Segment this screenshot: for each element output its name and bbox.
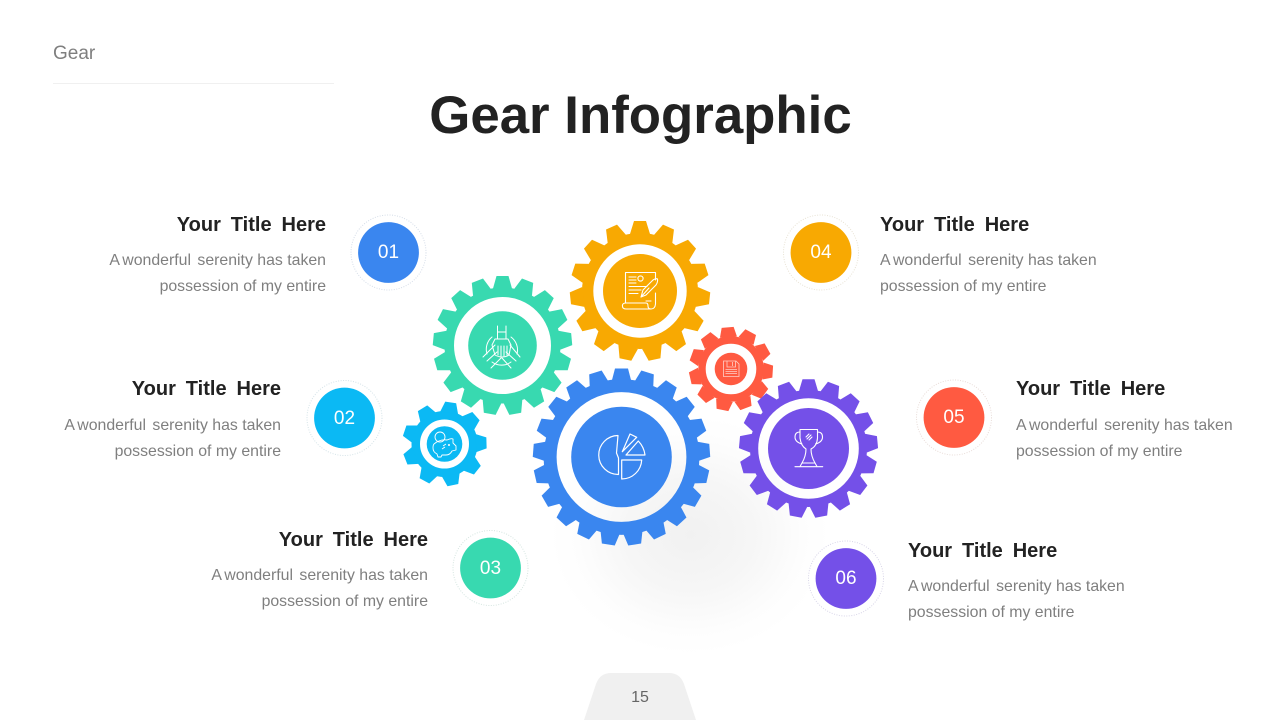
text block 03: A wonderful serenity has taken	[211, 567, 428, 584]
text block 01: possession of my entire	[160, 278, 326, 295]
text block 06: possession of my entire	[908, 604, 1074, 621]
badge number 04: 04	[810, 242, 832, 263]
badge number 01: 01	[378, 242, 399, 263]
text block 04: Your Title Here	[880, 214, 1029, 236]
text block 01: Your Title Here	[177, 214, 326, 236]
text block 02: A wonderful serenity has taken	[64, 417, 281, 434]
text block 05	[1016, 378, 1233, 460]
text block 05: A wonderful serenity has taken	[1016, 417, 1233, 434]
text block 03	[211, 529, 428, 610]
gear: red	[688, 327, 773, 412]
icon: trophy	[795, 430, 823, 467]
gear: green	[432, 276, 573, 416]
text block 02	[64, 378, 281, 460]
text block 03: possession of my entire	[262, 593, 428, 610]
gear: cyan	[402, 401, 487, 487]
text block 04: A wonderful serenity has taken	[880, 252, 1097, 269]
soft shadow under gears	[550, 415, 830, 655]
page number: 15	[631, 689, 649, 706]
badge number 03: 03	[480, 558, 501, 578]
badge number 05: 05	[943, 407, 965, 428]
text block 04	[880, 214, 1097, 295]
badge number 02: 02	[334, 408, 355, 428]
gear: blue	[533, 368, 710, 546]
icon: piggy bank	[433, 432, 456, 457]
icon: document and quill	[622, 272, 658, 309]
badge 04	[784, 215, 858, 290]
text block 02: possession of my entire	[115, 443, 281, 460]
section label: Gear	[53, 42, 95, 64]
badge number 06: 06	[835, 568, 857, 589]
page number tab	[584, 673, 696, 720]
badge 05	[916, 380, 992, 455]
text block 02: Your Title Here	[132, 378, 281, 400]
text block 05: possession of my entire	[1016, 443, 1182, 460]
text block 06: Your Title Here	[908, 540, 1057, 562]
text block 01: A wonderful serenity has taken	[109, 252, 326, 269]
badge 02	[307, 380, 382, 456]
text block 06: A wonderful serenity has taken	[908, 578, 1125, 595]
badge 03	[453, 530, 528, 606]
text block 03: Your Title Here	[279, 529, 428, 551]
title: Gear Infographic	[429, 86, 852, 144]
gear: purple	[739, 379, 878, 518]
text block 06	[908, 540, 1125, 621]
text block 04: possession of my entire	[880, 278, 1046, 295]
icon: pie chart	[599, 434, 645, 479]
header divider line	[53, 82, 334, 84]
icon: floppy disk	[724, 361, 739, 376]
gear: orange	[569, 221, 711, 362]
badge 06	[808, 541, 884, 616]
badge 01	[351, 215, 426, 290]
text block 05: Your Title Here	[1016, 378, 1165, 400]
text block 01	[109, 214, 326, 295]
icon: joined hands	[483, 326, 520, 368]
